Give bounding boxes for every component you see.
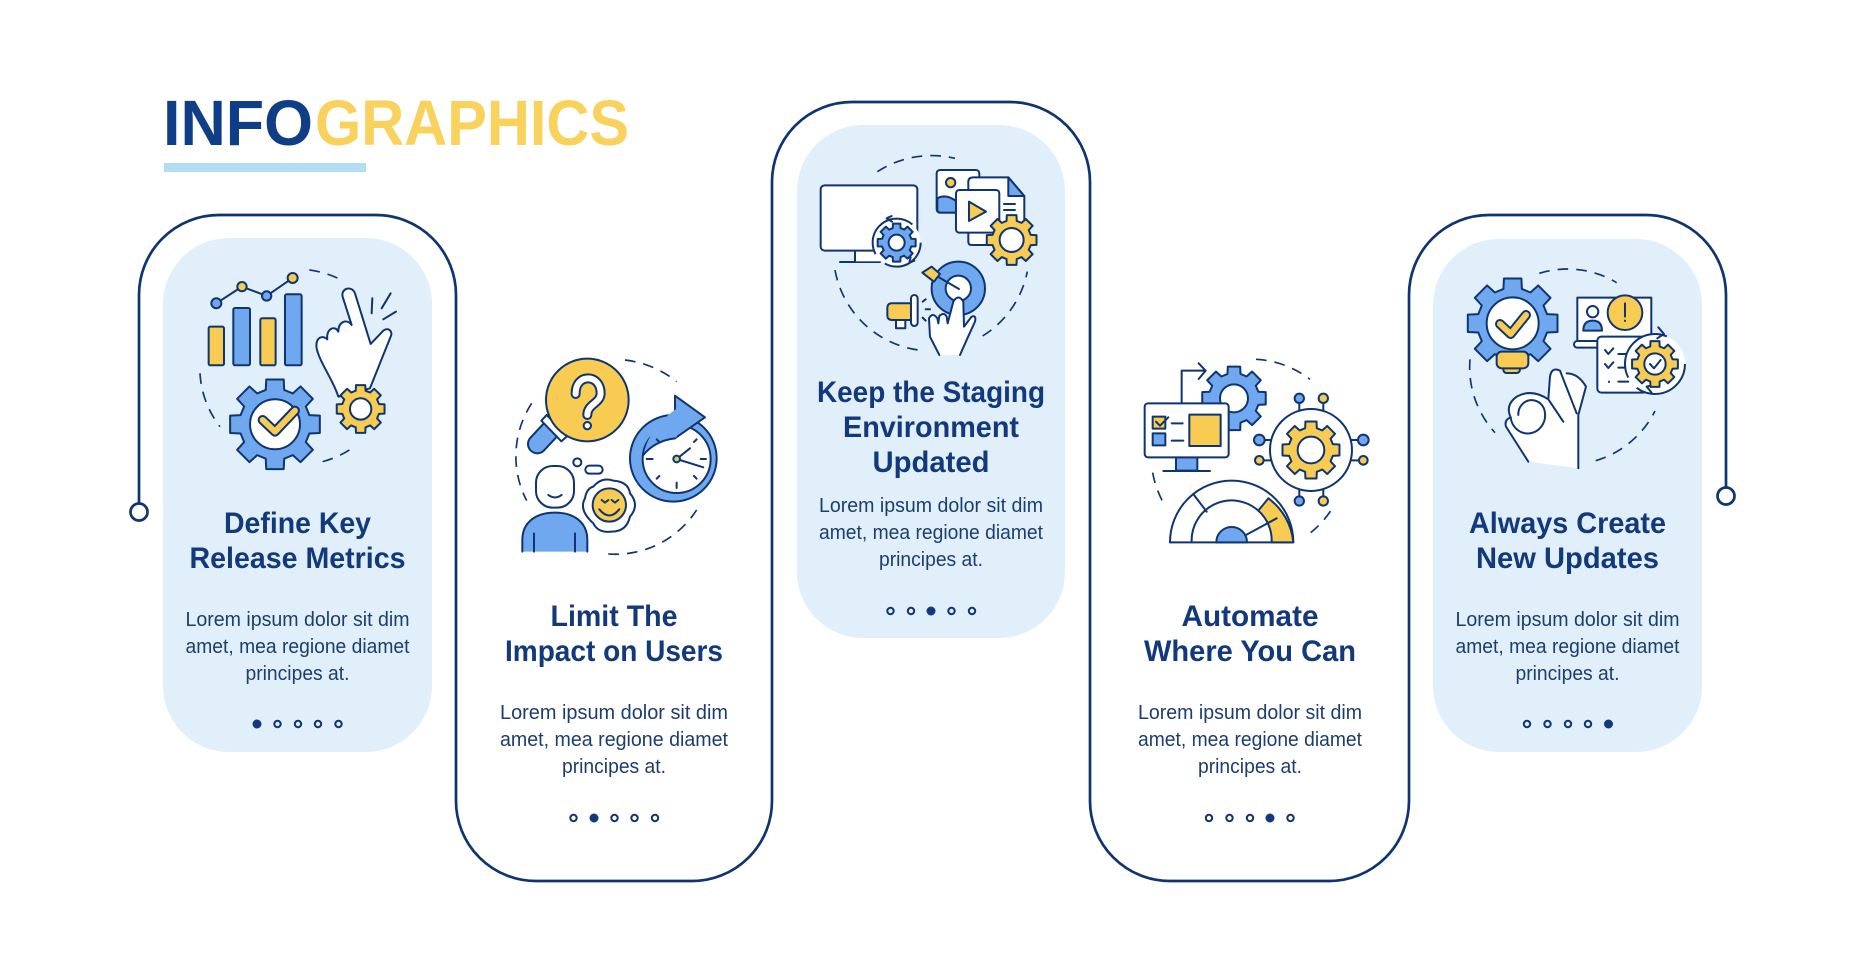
body text: Lorem ipsum dolor sit dim bbox=[186, 609, 410, 631]
body text bbox=[1456, 609, 1680, 685]
page dots bbox=[887, 606, 975, 616]
heading: Updated bbox=[872, 446, 990, 479]
panel text: define key release metrics bbox=[186, 507, 410, 728]
title bbox=[163, 87, 629, 159]
page dots bbox=[1206, 814, 1294, 822]
body text bbox=[186, 609, 410, 685]
page dots bbox=[570, 814, 658, 822]
page dots bbox=[252, 720, 342, 728]
heading bbox=[817, 376, 1045, 479]
icon: magnifier, clock and user bbox=[516, 359, 717, 554]
heading: Release Metrics bbox=[190, 542, 406, 575]
panel text: always create new updates bbox=[1456, 507, 1680, 728]
body text: Lorem ipsum dolor sit dim bbox=[1138, 702, 1362, 724]
panel background: define key release metrics bbox=[163, 238, 432, 752]
body text: Lorem ipsum dolor sit dim bbox=[500, 702, 728, 724]
panel background: keep the staging environment updated bbox=[797, 125, 1065, 638]
body text: Lorem ipsum dolor sit dim bbox=[819, 495, 1043, 517]
panel background: always create new updates bbox=[1433, 239, 1702, 752]
body text: amet, mea regione diamet bbox=[1138, 729, 1362, 751]
left connector end bbox=[130, 504, 148, 520]
body text: principes at. bbox=[1516, 663, 1620, 685]
panel text: keep the staging environment updated bbox=[817, 376, 1045, 616]
heading: Define Key bbox=[224, 507, 371, 540]
icon: bulb gear, laptop alert, checklist and ok hand bbox=[1468, 269, 1685, 468]
panel text: limit the impact on users bbox=[500, 600, 728, 822]
body text: Lorem ipsum dolor sit dim bbox=[1456, 609, 1680, 631]
panel text: automate where you can bbox=[1138, 600, 1362, 822]
body text bbox=[500, 702, 728, 778]
body text bbox=[1138, 702, 1362, 778]
body text: principes at. bbox=[562, 756, 666, 778]
body text: amet, mea regione diamet bbox=[500, 729, 728, 751]
body text: principes at. bbox=[1198, 756, 1302, 778]
body text: amet, mea regione diamet bbox=[819, 522, 1043, 544]
title underline bbox=[164, 163, 366, 172]
heading bbox=[190, 507, 406, 575]
title: GRAPHICS bbox=[315, 87, 629, 159]
page dots bbox=[1524, 720, 1613, 728]
connecting outline bbox=[139, 102, 1726, 881]
body text: amet, mea regione diamet bbox=[1456, 636, 1680, 658]
heading: Keep the Staging bbox=[817, 376, 1045, 409]
body text: amet, mea regione diamet bbox=[186, 636, 410, 658]
icon: monitor, media files, target and hand bbox=[821, 156, 1037, 355]
heading: Always Create bbox=[1469, 507, 1666, 540]
icon: metrics chart, hand and gears bbox=[200, 270, 396, 469]
heading bbox=[505, 600, 723, 668]
right connector end bbox=[1718, 488, 1734, 504]
body text: principes at. bbox=[246, 663, 350, 685]
heading bbox=[1469, 507, 1666, 575]
body text: principes at. bbox=[879, 549, 983, 571]
heading: Environment bbox=[843, 411, 1019, 444]
body text bbox=[819, 495, 1043, 571]
heading bbox=[1144, 600, 1356, 668]
icon: automation monitor, gear hub and gauge bbox=[1145, 359, 1369, 542]
heading: New Updates bbox=[1476, 542, 1659, 575]
heading: Where You Can bbox=[1144, 635, 1356, 668]
heading: Limit The bbox=[550, 600, 678, 633]
heading: Automate bbox=[1182, 600, 1318, 633]
heading: Impact on Users bbox=[505, 635, 723, 668]
title: INFO bbox=[163, 87, 313, 159]
